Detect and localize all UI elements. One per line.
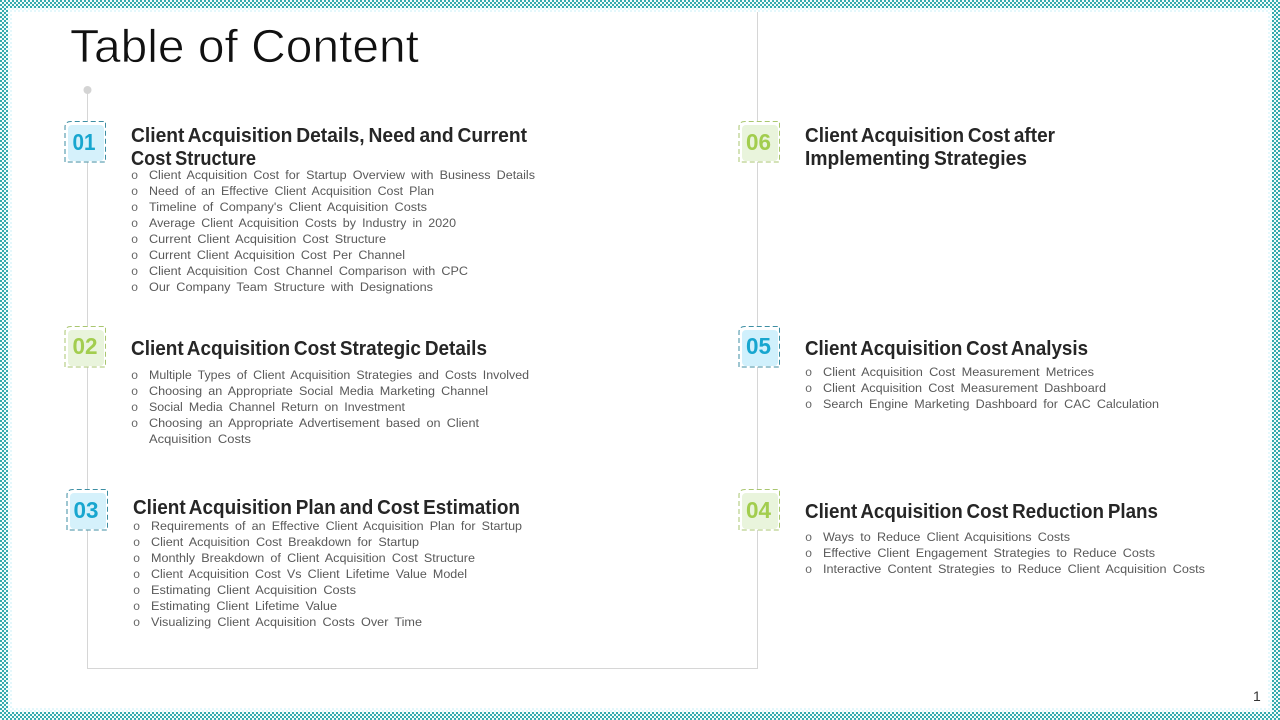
list 05: o [805, 366, 812, 380]
title: Table of Content [70, 20, 419, 72]
page number: 1 [1253, 688, 1261, 704]
list 04: o [805, 563, 812, 577]
list 05: o [805, 398, 812, 412]
heading 01: Cost Structure [131, 148, 256, 170]
heading 06: Client Acquisition Cost after [805, 125, 1055, 147]
list 02: o [131, 417, 138, 431]
panel: section 02 [65, 326, 529, 446]
list 01: Average Client Acquisition Costs by Industry in 2020 [149, 216, 456, 230]
list 03: o [133, 520, 140, 534]
badge 01 [65, 121, 106, 162]
list 01: o [131, 249, 138, 263]
panel: section 01 [65, 121, 535, 295]
list 05: o [805, 382, 812, 396]
list 02: o [131, 385, 138, 399]
list 03: o [133, 552, 140, 566]
list 04: o [805, 531, 812, 545]
list 01: Current Client Acquisition Cost Per Channel [149, 248, 405, 262]
list 03: Requirements of an Effective Client Acquisition Plan for Startup [151, 519, 522, 533]
list 02: Acquisition Costs [149, 432, 251, 446]
heading 06 [805, 125, 1055, 170]
list 01: o [131, 265, 138, 279]
list 03: Estimating Client Acquisition Costs [151, 583, 356, 597]
panel: section 06 [739, 121, 1055, 170]
list 04: Ways to Reduce Client Acquisitions Costs [823, 530, 1070, 544]
list 04 [805, 530, 1205, 577]
list 02: Choosing an Appropriate Social Media Marketing Channel [149, 384, 488, 398]
list 01: Client Acquisition Cost for Startup Overview with Business Details [149, 168, 535, 182]
panel: section 05 [739, 326, 1159, 412]
list 01: o [131, 185, 138, 199]
list 04: o [805, 547, 812, 561]
panel: section 03 [67, 489, 522, 630]
heading 03: Client Acquisition Plan and Cost Estimation [133, 497, 520, 519]
list 01: Client Acquisition Cost Channel Comparison with CPC [149, 264, 468, 278]
list 05: Search Engine Marketing Dashboard for CAC Calculation [823, 397, 1159, 411]
list 02: o [131, 401, 138, 415]
list 03: o [133, 568, 140, 582]
list 05: Client Acquisition Cost Measurement Metrices [823, 365, 1094, 379]
badge 02: 02 [72, 333, 98, 359]
list 01: Current Client Acquisition Cost Structure [149, 232, 386, 246]
badge 06: 06 [746, 129, 771, 155]
list 03: Monthly Breakdown of Client Acquisition Cost Structure [151, 551, 475, 565]
badge 02 [65, 326, 106, 367]
list 03: o [133, 584, 140, 598]
list 02: o [131, 369, 138, 383]
list 03: o [133, 536, 140, 550]
badge 03: 03 [74, 497, 98, 523]
list 03: o [133, 600, 140, 614]
list 03: Client Acquisition Cost Breakdown for Startup [151, 535, 419, 549]
list 01: o [131, 169, 138, 183]
list 03 [133, 519, 522, 630]
list 04: Interactive Content Strategies to Reduce Client Acquisition Costs [823, 562, 1205, 576]
list 01: o [131, 201, 138, 215]
badge 01: 01 [72, 129, 96, 155]
list 02: Multiple Types of Client Acquisition Strategies and Costs Involved [149, 368, 529, 382]
heading 01: Client Acquisition Details, Need and Current [131, 125, 527, 147]
badge 04 [739, 489, 780, 530]
list 02: Social Media Channel Return on Investment [149, 400, 406, 414]
list 05 [805, 365, 1159, 412]
badge 03 [67, 489, 108, 530]
list 03: Visualizing Client Acquisition Costs Over Time [151, 615, 422, 629]
heading 04: Client Acquisition Cost Reduction Plans [805, 501, 1158, 523]
list 02 [131, 368, 529, 446]
list 01: o [131, 233, 138, 247]
list 05: Client Acquisition Cost Measurement Dashboard [823, 381, 1106, 395]
list 04: Effective Client Engagement Strategies to Reduce Costs [823, 546, 1155, 560]
list 03: Estimating Client Lifetime Value [151, 599, 337, 613]
badge 06 [739, 121, 780, 162]
list 01 [131, 168, 535, 295]
list 01: o [131, 217, 138, 231]
list 01: Timeline of Company's Client Acquisition Costs [149, 200, 427, 214]
heading 02: Client Acquisition Cost Strategic Details [131, 338, 487, 360]
badge 04: 04 [746, 497, 771, 523]
heading 05: Client Acquisition Cost Analysis [805, 338, 1088, 360]
badge 05: 05 [746, 333, 771, 359]
list 01: Need of an Effective Client Acquisition Cost Plan [149, 184, 434, 198]
badge 05 [739, 326, 780, 367]
list 02: Choosing an Appropriate Advertisement based on Client [149, 416, 480, 430]
list 01: Our Company Team Structure with Designations [149, 280, 433, 294]
list 03: Client Acquisition Cost Vs Client Lifetime Value Model [151, 567, 467, 581]
list 01: o [131, 281, 138, 295]
heading 06: Implementing Strategies [805, 148, 1027, 170]
timeline connector [84, 12, 758, 668]
panel: section 04 [739, 489, 1205, 577]
list 03: o [133, 616, 140, 630]
heading 01 [131, 125, 527, 170]
